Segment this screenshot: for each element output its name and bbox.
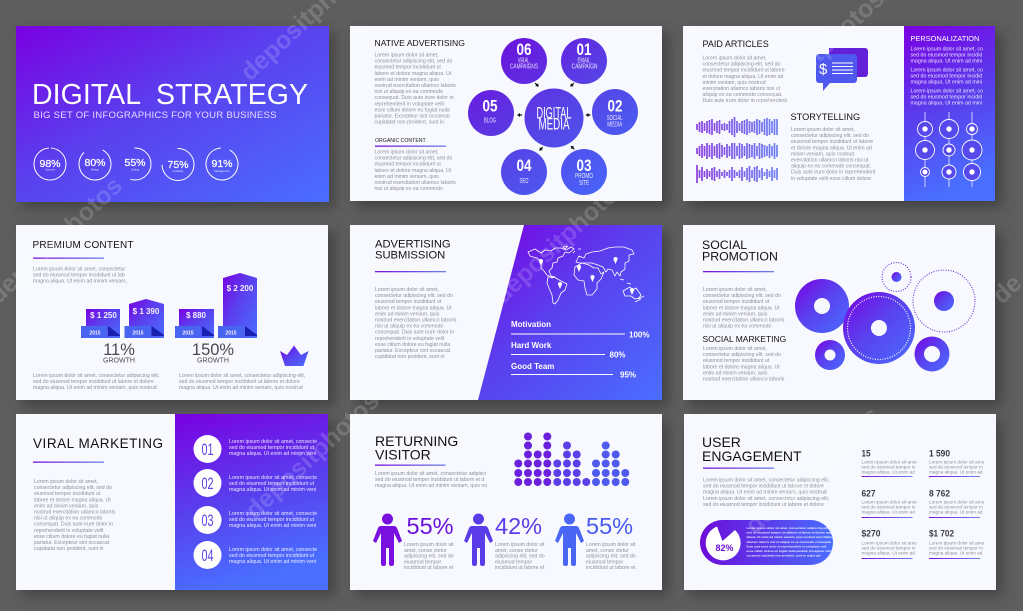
numbered circles: 03 — [202, 512, 214, 530]
person 3 text: eiusmod tempor — [586, 559, 623, 565]
stat: $1 702 — [929, 528, 985, 559]
ring labels: Creativity — [173, 169, 184, 173]
callout pill — [700, 520, 836, 565]
numbered circles — [194, 435, 222, 569]
stat: 55%: 55% — [586, 513, 633, 539]
progress: hard work: 80% — [610, 350, 626, 360]
chart: growth blocks: 2015 — [182, 330, 194, 336]
body text: consectetur adipiscing elit, sed do — [375, 293, 453, 299]
ring labels: Coding — [131, 168, 140, 172]
body text: Lorem ipsum dolor sit amet, — [375, 287, 439, 293]
panel: viral marketing — [16, 414, 328, 590]
circle labels: MEDIA — [538, 115, 570, 133]
stat: 8 762: 8 762 — [929, 488, 950, 500]
body text: consectetur adipiscing elit, sed do — [34, 485, 112, 491]
body text: eiusmod tempor incididunt ut — [703, 358, 770, 364]
stat: 8 762: Lorem ipsum dolor sit ame — [929, 500, 985, 504]
panel: paid articles — [683, 26, 995, 201]
body text: enim ad minim veniam, quis — [703, 311, 768, 317]
body text: sed do eiusmod tempor incididunt ut labore et dolore — [703, 502, 824, 508]
body text: sed do eiusmod tempor incididunt ut labore et dolore — [703, 484, 824, 490]
stat: 627: magna aliqua. Ut enim ad — [862, 510, 915, 514]
body text: nostrud exercitation ullamco laboris — [375, 318, 457, 324]
growth stat: 150%: 150% — [192, 341, 234, 359]
heading: social marketing: SOCIAL MARKETING — [702, 334, 786, 344]
heading: USER — [702, 434, 741, 450]
chart: sound waves — [697, 117, 777, 183]
stat: 1 590 — [929, 448, 985, 477]
body text: in voluptate velit esse cillum dolore — [791, 176, 871, 182]
stat: 1 590: sed do eiusmod tempor in — [929, 464, 983, 470]
stat: $270: Lorem ipsum dolor sit ame — [862, 540, 917, 546]
person 3 — [555, 514, 584, 566]
circle labels: CAMPAIGN — [572, 62, 598, 71]
arrows — [517, 82, 590, 152]
stat: $1 702: sed do eiusmod tempor in — [929, 546, 983, 550]
body text: exercitation ullamco laboris nisi ut — [702, 86, 781, 92]
item text: sed do eiusmod tempor incididunt ut — [229, 553, 315, 559]
personalization sidebar — [904, 26, 995, 201]
stat: 42%: 42% — [495, 513, 542, 539]
body text: reprehenderit in voluptate velit — [375, 336, 445, 342]
chart: growth blocks: 2015 — [225, 330, 237, 336]
gears diagram — [795, 262, 975, 372]
stat: 1 590: Lorem ipsum dolor sit ame — [929, 460, 985, 464]
circle labels: SEO — [520, 176, 529, 185]
growth stat: 150%: GROWTH — [197, 358, 229, 364]
progress: hard work: Hard Work — [511, 341, 552, 350]
person 2 text: eiusmod tempor — [495, 559, 532, 565]
body text: minim veniam, quis nostrud — [702, 80, 766, 86]
circle labels: 03 — [576, 157, 592, 175]
body text: consectetur adipiscing elit, sed do — [791, 133, 869, 139]
body text: nisi ut aliquip ex ea commodo — [375, 324, 443, 330]
body text: aliquip ex ea commodo consequat. — [702, 92, 783, 98]
item text: Lorem ipsum dolor sit amet, consecte — [229, 511, 317, 517]
intro text: magna aliqua. Ut enim ad minim veniam, — [33, 278, 127, 284]
item text: Lorem ipsum dolor sit amet, consecte — [229, 439, 317, 445]
panel: digital strategy — [16, 26, 329, 202]
body text: enim ad minim veniam, quis — [374, 77, 439, 83]
values: $ 1 390 — [133, 307, 160, 316]
item text: magna aliqua. Ut enim ad minim veni — [229, 523, 316, 529]
ring labels: 98% — [39, 158, 61, 170]
body text: labore et dolore magna aliqua. Ut — [374, 168, 452, 174]
heading: ADVERTISING — [375, 239, 451, 251]
person 1 text: Lorem ipsum dolor sit — [404, 542, 454, 548]
personalization text: magna aliqua. Ut enim ad mini — [910, 100, 982, 106]
ring labels: Design — [91, 168, 100, 172]
pill text: Duis aute irure dolor in reprehenderit in voluptate velit — [746, 544, 826, 548]
body text: labore et dolore magna aliqua. Ut — [703, 305, 780, 311]
item text: Lorem ipsum dolor sit amet, consecte — [229, 547, 317, 553]
watermarks: depositphotos — [740, 401, 885, 539]
heading: RETURNING — [375, 433, 458, 449]
progress: good team: Good Team — [511, 362, 554, 371]
item text: sed do eiusmod tempor incididunt ut — [229, 445, 315, 451]
body text: eiusmod tempor incididunt ut — [703, 299, 770, 305]
person 1 — [373, 514, 402, 566]
pie chart — [706, 526, 741, 560]
person 3 text: amet, conse ctetur — [586, 548, 629, 554]
body text: consectetur adipiscing elit, sed do — [702, 62, 780, 68]
body text: esse cillum dolore eu fugiat nulla — [375, 342, 450, 348]
panel: advertising submission — [350, 225, 662, 400]
progress: motivation: Motivation — [511, 320, 551, 329]
body text: nisi ut aliquip ex ea commodo — [374, 186, 443, 192]
stat: $1 702: $1 702 — [929, 528, 954, 540]
stat: 15: sed do eiusmod tempor in — [862, 464, 916, 470]
body text: Duis aute irure dolor in reprehenderit — [791, 170, 876, 176]
circle labels: CAMPAIGNS — [510, 62, 538, 71]
body text: cupidatat non proident, sunt in — [375, 354, 445, 360]
body text: Lorem ipsum dolor sit amet, consectetur adipiscing elit, — [703, 478, 829, 484]
progress rings — [33, 142, 244, 186]
body text: eiusmod tempor incididunt ut — [374, 162, 441, 168]
chart: growth blocks: 2015 — [132, 330, 144, 336]
circle labels: PROMO — [575, 171, 593, 180]
numbered circles: 02 — [202, 475, 214, 493]
progress: motivation — [511, 320, 649, 340]
stat: 627: Lorem ipsum dolor sit ame — [862, 500, 917, 504]
numbered circles: 01 — [202, 441, 214, 459]
heading: organic content: ORGANIC CONTENT — [375, 138, 427, 144]
stat: $270 — [862, 528, 917, 559]
intro text: sed do eiusmod tempor incididunt ut labore et d — [375, 477, 484, 483]
body text: reprehenderit in voluptate velit — [34, 528, 104, 534]
values: $ 2 200 — [227, 284, 254, 293]
body text: eiusmod tempor incididunt ut — [34, 491, 101, 497]
person 2 text: Lorem ipsum dolor sit — [495, 542, 545, 548]
stat: 55%: 55% — [406, 513, 454, 539]
body text: consectetur adipiscing elit, sed do — [374, 156, 452, 162]
heading: personalization: PERSONALIZATION — [910, 34, 979, 43]
personalization text: Lorem ipsum dolor sit amet, co — [910, 88, 983, 94]
personalization text: magna aliqua. Ut enim ad mini — [910, 58, 982, 64]
heading: paid articles: PAID ARTICLES — [702, 39, 769, 49]
heading: PROMOTION — [702, 250, 778, 264]
person 3 text: incididunt ut labore et — [586, 565, 636, 571]
body text: labore et dolore magna aliqua. Ut — [34, 497, 111, 503]
stat: 15: magna aliqua. Ut enim ad — [862, 470, 915, 474]
diagram: digital media circles — [468, 38, 638, 195]
stat: $1 702: Lorem ipsum dolor sit ame — [929, 540, 985, 546]
intro text: magna aliqua. Ut enim ad minim veniam, quis no — [375, 483, 487, 489]
person 1 text: adipiscing elit, sed do — [404, 554, 454, 560]
personalization text: Lorem ipsum dolor sit amet, co — [910, 68, 983, 74]
item text: magna aliqua. Ut enim ad minim veni — [229, 559, 316, 565]
body text: esse cillum dolore eu fugiat nulla — [374, 107, 450, 113]
pill text: esse cillum dolore eu fugiat nulla pariatur. Excepteur sint — [746, 549, 831, 553]
values: $ 880 — [186, 311, 207, 320]
panel: native advertising — [350, 26, 662, 201]
body text: nostrud exercitation ullamco laboris — [703, 318, 785, 324]
body text: et dolore magna aliqua. Ut enim ad — [702, 74, 783, 80]
item text: sed do eiusmod tempor incididunt ut — [229, 517, 315, 523]
body text: Lorem ipsum dolor sit amet, — [34, 479, 98, 485]
personalization text: magna aliqua. Ut enim ad mini — [910, 80, 982, 86]
heading: VIRAL MARKETING — [33, 436, 163, 451]
progress: good team: 95% — [620, 370, 636, 380]
body text: consequat. Duis aute irure dolor in — [375, 330, 454, 336]
body text: labore et dolore magna aliqua. Ut — [374, 71, 452, 77]
footer text: sed do eiusmod tempor incididunt ut labore et dolore — [33, 379, 154, 385]
heading: VISITOR — [375, 446, 431, 462]
person 2 — [464, 514, 493, 566]
body text: consequat. Duis aute irure dolor in — [34, 522, 113, 528]
body text: cupidatat non proident, sunt in — [374, 120, 444, 126]
dot matrix chart — [514, 432, 629, 486]
circle labels: 01 — [576, 41, 592, 59]
title: DIGITAL STRATEGY — [32, 79, 308, 111]
ring labels: 91% — [211, 158, 233, 170]
person 3 text: adipiscing elit, sed do — [586, 554, 636, 560]
stat: 627: 627 — [862, 488, 876, 500]
person 1 text: amet, conse ctetur — [404, 548, 447, 554]
body text: Lorem ipsum dolor sit amet, consectetur adipiscing elit, — [703, 496, 829, 502]
body text: nostrud exercitation ullamco laboris — [374, 83, 456, 89]
body text: consectetur adipiscing elit, sed do — [374, 59, 452, 65]
body text: Lorem ipsum dolor sit amet, — [791, 127, 855, 133]
body text: magna aliqua. Ut enim ad minim veniam, quis nostrud — [703, 490, 827, 496]
body text: pariatur. Excepteur sint occaecat — [374, 113, 450, 119]
stat: $270: sed do eiusmod tempor in — [862, 546, 916, 550]
body text: enim ad minim veniam, quis — [34, 503, 99, 509]
stat: 8 762: magna aliqua. Ut enim ad — [929, 510, 983, 514]
body text: aliquip ex ea commodo consequat. — [791, 164, 871, 170]
body text: eiusmod tempor incididunt ut — [374, 65, 441, 71]
person 2 text: adipiscing elit, sed do — [495, 554, 545, 560]
stat: 1 590: 1 590 — [929, 448, 950, 460]
stat: $270: $270 — [862, 528, 880, 540]
body text: nisi ut aliquip ex ea commodo — [374, 89, 443, 95]
ring labels: 80% — [84, 157, 106, 169]
intro text: sed do eiusmod tempor incididunt ut lab — [33, 272, 125, 278]
personalization text: Lorem ipsum dolor sit amet, co — [910, 46, 983, 52]
subtitle: BIG SET OF INFOGRAPHICS FOR YOUR BUSINESS — [34, 110, 276, 121]
footer text: magna aliqua. Ut enim ad minim veniam, quis nostrud — [33, 385, 157, 391]
chart: growth blocks — [81, 273, 257, 338]
progress: hard work — [511, 341, 626, 360]
stat: 8 762: sed do eiusmod tempor in — [929, 504, 983, 510]
watermarks: depositphotos — [240, 386, 385, 524]
circle labels: VIRAL — [518, 55, 529, 64]
pill text: aliqua. Ut enim ad minim veniam, quis nostrud exercitation — [746, 535, 833, 539]
pill text: sed do eiusmod tempor incididunt ut labore et dolore magna — [746, 531, 836, 535]
chart: growth blocks: 2015 — [89, 330, 101, 336]
footer text: sed do eiusmod tempor incididunt ut labore et dolore — [179, 379, 300, 385]
body text: eiusmod tempor incididunt ut labore — [791, 139, 873, 145]
panel: social promotion — [683, 225, 995, 400]
stat: 15: Lorem ipsum dolor sit ame — [862, 460, 917, 464]
heading: storytelling: STORYTELLING — [790, 112, 860, 122]
ring labels: Management — [214, 169, 230, 173]
heading: SUBMISSION — [375, 249, 445, 261]
item text: magna aliqua. Ut enim ad minim veni — [229, 487, 316, 493]
intro text: Lorem ipsum dolor sit amet, consectetur adipisci — [375, 471, 486, 477]
stat: $270: magna aliqua. Ut enim ad — [862, 550, 915, 556]
ring labels: 55% — [124, 157, 146, 169]
stat: 627 — [862, 488, 917, 518]
personalization text: sed do eiusmod tempor incidid — [910, 94, 982, 100]
pill text: occaecat cupidatat non proident, sunt in culpa qui — [746, 554, 821, 558]
body text: Lorem ipsum dolor sit amet, — [703, 346, 767, 352]
circle labels: 02 — [608, 98, 622, 116]
body text: pariatur. Excepteur sint occaecat — [375, 348, 451, 354]
circle labels: MEDIA — [607, 120, 622, 129]
growth stat: 11%: GROWTH — [103, 358, 135, 364]
world map — [528, 246, 644, 304]
circle labels: DIGITAL — [536, 104, 572, 122]
circle labels: 06 — [516, 41, 532, 59]
pill text: Lorem ipsum dolor sit amet, consectetur adipiscing elit, — [746, 526, 829, 530]
circle labels — [482, 41, 623, 187]
heading: ENGAGEMENT — [702, 448, 802, 464]
circle labels: BLOG — [484, 116, 496, 125]
heading: PREMIUM CONTENT — [32, 240, 134, 251]
gradient sidebar — [175, 414, 328, 590]
item text: sed do eiusmod tempor incididunt ut — [229, 481, 315, 487]
icon: chat bubbles — [816, 48, 868, 91]
person 2 text: incididunt ut labore et — [495, 565, 545, 571]
item text: magna aliqua. Ut enim ad minim veni — [229, 451, 316, 457]
body text: et dolore magna aliqua. Ut enim ad — [791, 145, 872, 151]
personalization text: sed do eiusmod tempor incidid — [910, 52, 982, 58]
ring labels: 75% — [167, 159, 189, 171]
item text: Lorem ipsum dolor sit amet, consecte — [229, 475, 317, 481]
body text: consectetur adipiscing elit, sed do — [703, 352, 781, 358]
ring labels — [39, 157, 233, 173]
body text: reprehenderit in voluptate velit — [374, 101, 445, 107]
body text: enim ad minim veniam, quis — [374, 174, 439, 180]
progress: good team — [511, 362, 636, 380]
personalization text: sed do eiusmod tempor incidid — [910, 74, 982, 80]
body text: labore et dolore magna aliqua. Ut — [703, 364, 780, 370]
circle labels: 04 — [516, 157, 532, 175]
stat: 627: sed do eiusmod tempor in — [862, 504, 916, 510]
body text: Duis aute irure dolor in reprehenderit — [702, 98, 788, 104]
numbered circles: 04 — [202, 547, 214, 565]
body text: pariatur. Excepteur sint occaecat — [34, 540, 110, 546]
sliders — [916, 112, 982, 187]
body text: enim ad minim veniam, quis — [703, 370, 768, 376]
growth stat: 11%: 11% — [103, 341, 135, 359]
body text: Lorem ipsum dolor sit amet, — [703, 287, 767, 293]
icon: chat bubbles: $ — [819, 61, 828, 78]
body text: eiusmod tempor incididunt ut — [375, 299, 442, 305]
body text: exercitation ullamco laboris nisi ut — [791, 158, 869, 164]
body text: cupidatat non proident, sunt in — [34, 546, 104, 552]
body text: consectetur adipiscing elit, sed do — [703, 293, 781, 299]
panel: user engagement — [684, 414, 996, 590]
footer text: Lorem ipsum dolor sit amet, consectetur adipiscing elit, — [33, 373, 159, 379]
circle labels: SOCIAL — [607, 113, 623, 122]
body text: Lorem ipsum dolor sit amet, — [374, 150, 439, 156]
body text: Lorem ipsum dolor sit amet, — [374, 52, 439, 58]
circle labels: SITE — [579, 178, 589, 187]
body text: nostrud exercitation ullamco laboris — [703, 376, 785, 382]
stat: 1 590: magna aliqua. Ut enim ad — [929, 470, 983, 474]
watermarks: depositphotos — [488, 171, 633, 309]
stat: 8 762 — [929, 488, 985, 518]
person 2 text: amet, conse ctetur — [495, 548, 538, 554]
body text: consequat. Duis aute irure dolor in — [374, 95, 454, 101]
body text: labore et dolore magna aliqua. Ut — [375, 305, 452, 311]
body text: esse cillum dolore eu fugiat nulla — [34, 534, 109, 540]
body text: minim veniam, quis nostrud — [791, 151, 854, 157]
stat: $1 702: magna aliqua. Ut enim ad — [929, 550, 983, 556]
body text: enim ad minim veniam, quis — [375, 311, 440, 317]
panel: returning visitor — [350, 414, 662, 590]
pill text: ullamco laboris nisi ut aliquip ex ea commodo consequat. — [746, 540, 832, 544]
heading: SOCIAL — [702, 238, 747, 252]
stat: 15: 15 — [862, 448, 871, 460]
map pins — [539, 257, 634, 295]
body text: nostrud exercitation ullamco laboris — [374, 180, 456, 186]
body text: eiusmod tempor incididunt ut labore — [702, 68, 785, 74]
body text: nisi ut aliquip ex ea commodo — [703, 324, 771, 330]
footer text: magna aliqua. Ut enim ad minim veniam, quis nostrud — [179, 385, 303, 391]
panel: premium content — [16, 225, 328, 400]
person 1 text: eiusmod tempor — [404, 559, 441, 565]
person 1 text: incididunt ut labore et — [404, 565, 454, 571]
footer text: Lorem ipsum dolor sit amet, consectetur adipiscing elit, — [179, 373, 305, 379]
ring labels: Success — [45, 168, 56, 172]
stat: 15 — [862, 448, 917, 477]
values: $ 1 250 — [90, 311, 117, 320]
body text: nostrud exercitation ullamco laboris — [34, 510, 116, 516]
body text: nisi ut aliquip ex ea commodo — [34, 516, 102, 522]
pie value: 82% — [716, 543, 734, 554]
circle labels: 05 — [482, 98, 498, 116]
gradient slant — [478, 225, 662, 400]
person 3 text: Lorem ipsum dolor sit — [586, 542, 636, 548]
progress: motivation: 100% — [629, 330, 649, 340]
body text: Lorem ipsum dolor sit amet, — [702, 56, 767, 62]
icon: crown — [280, 346, 308, 366]
values — [90, 284, 254, 320]
circle labels: EMAIL — [578, 55, 590, 64]
heading: native advertising: NATIVE ADVERTISING — [374, 38, 465, 48]
intro text: Lorem ipsum dolor sit amet, consectetur — [33, 266, 126, 272]
